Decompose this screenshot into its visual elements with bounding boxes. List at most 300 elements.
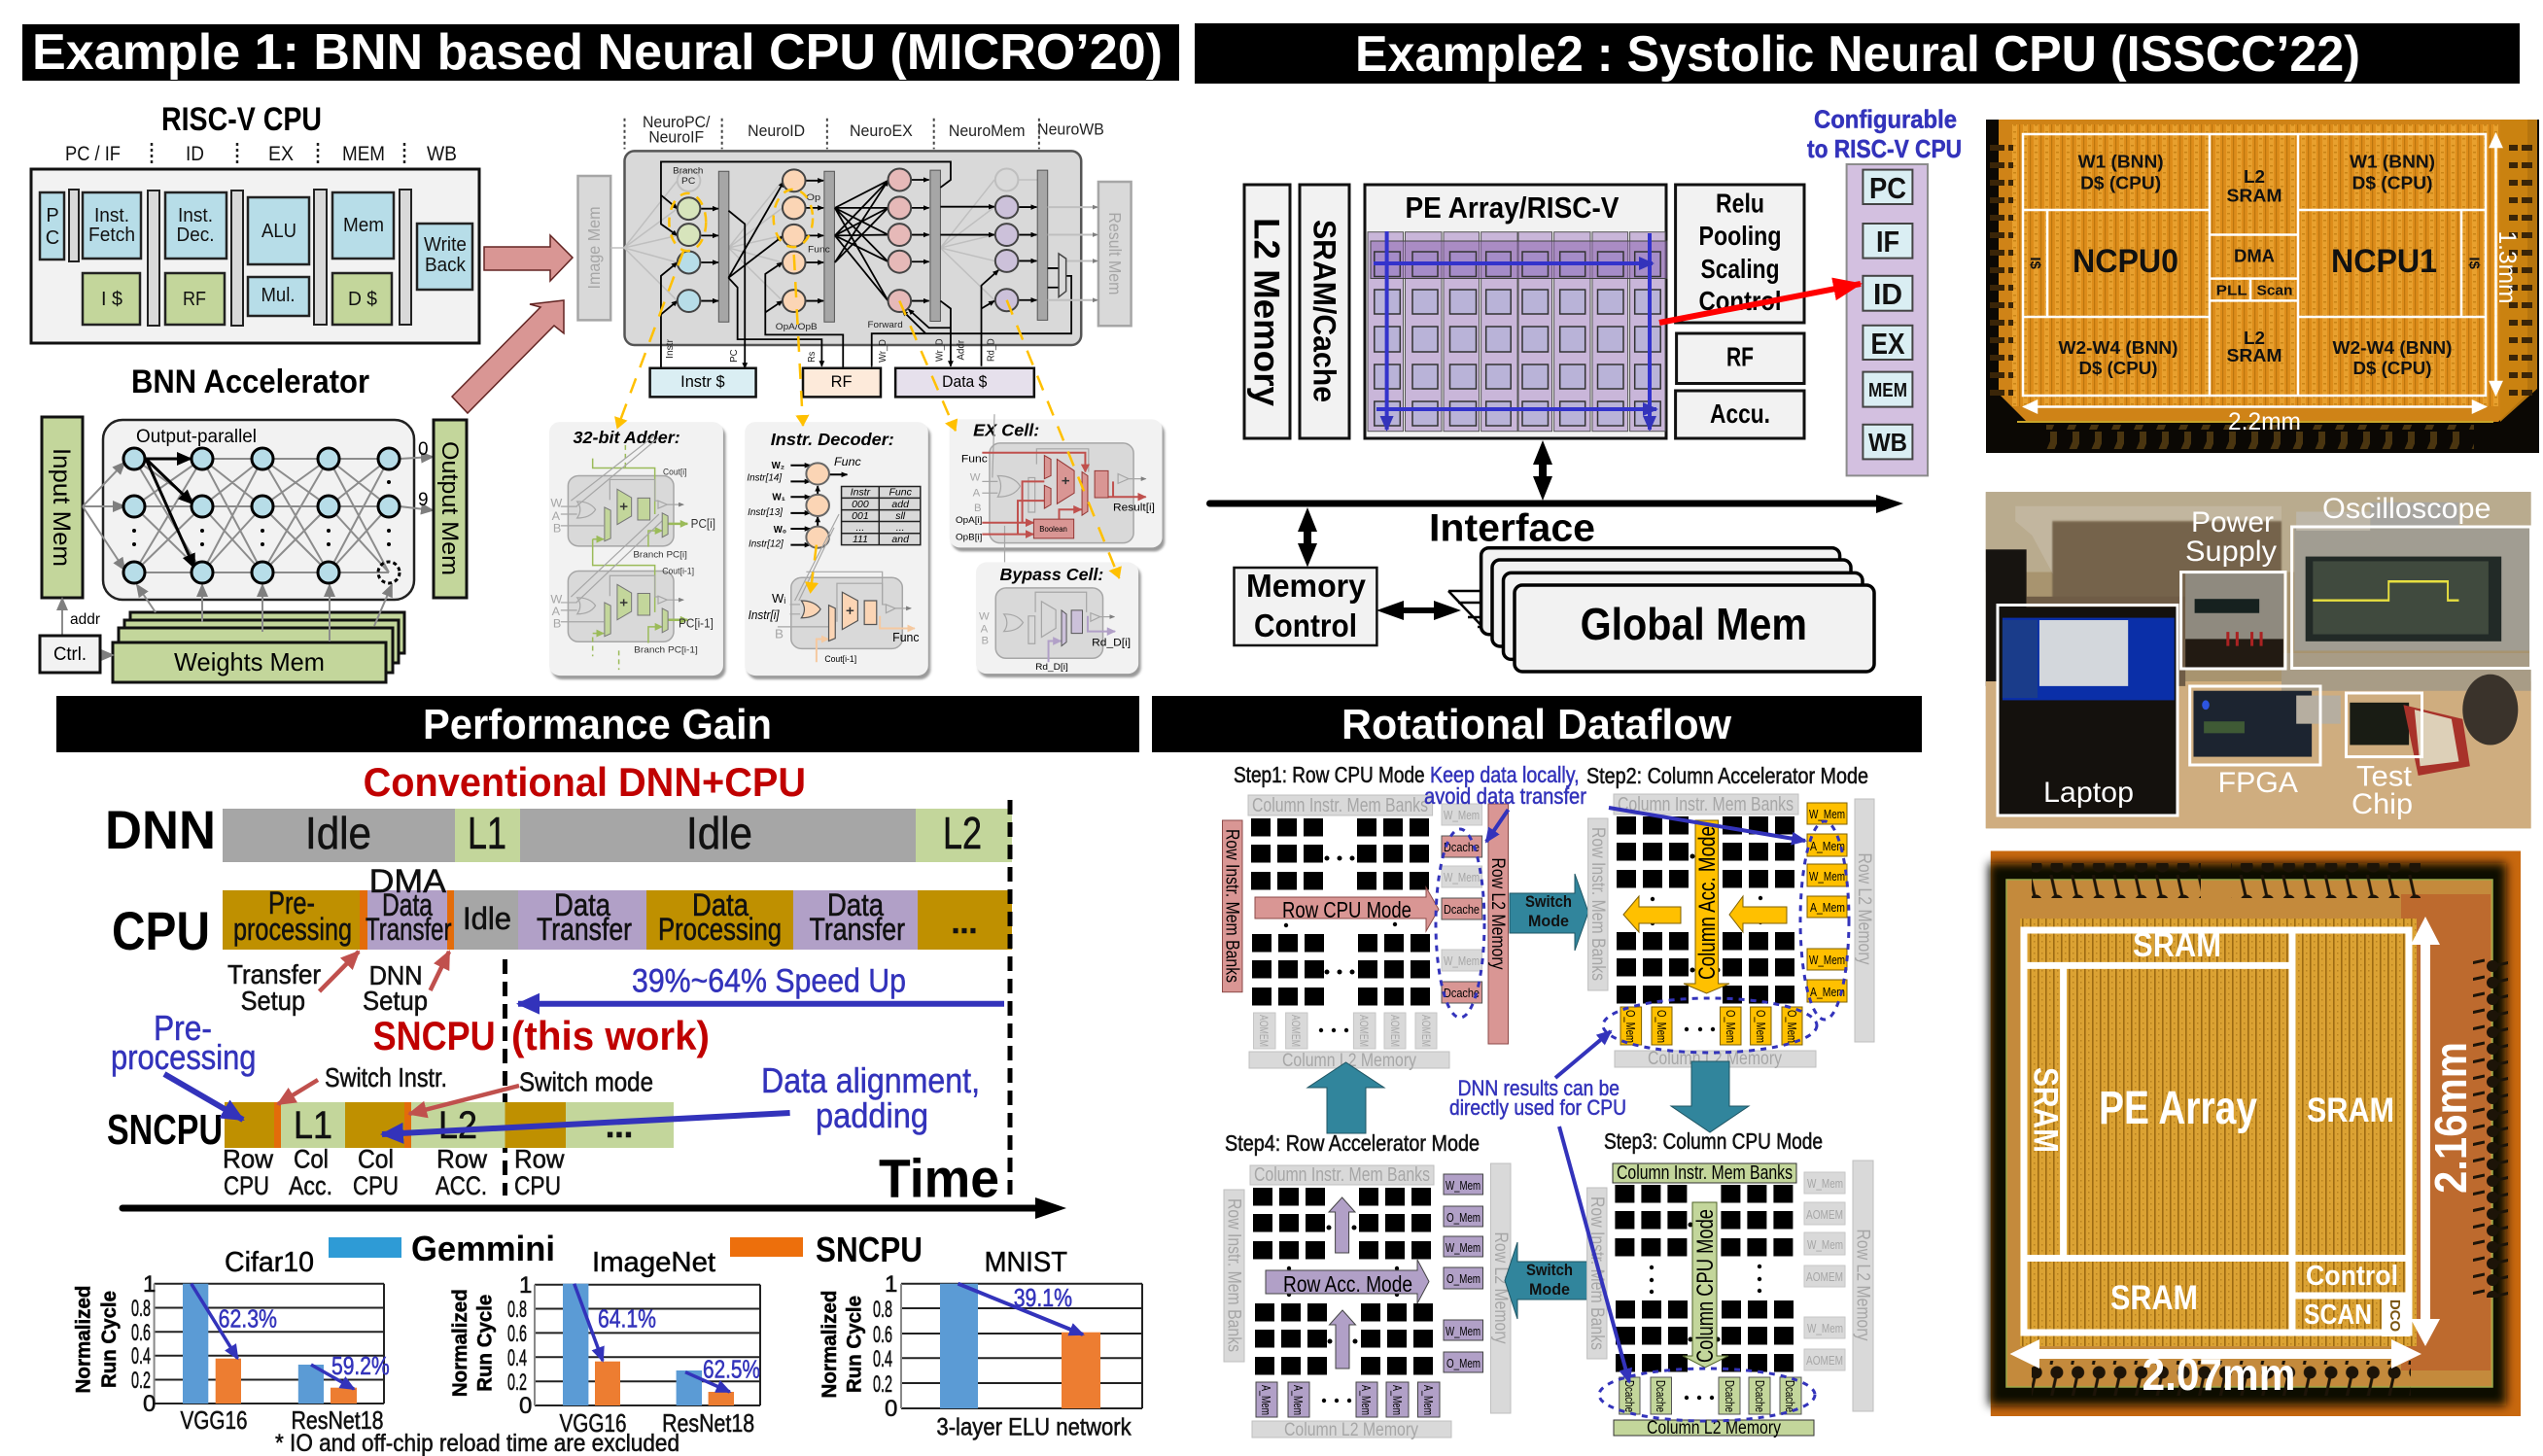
EX schematic: B xyxy=(974,503,982,514)
step 2 O_Mem row: O_Mem xyxy=(1724,1010,1738,1043)
execute stage neurons xyxy=(888,169,911,312)
decoder neurons xyxy=(747,455,861,550)
step 4 A_Mem row xyxy=(1256,1382,1440,1417)
bar chart: MNIST: 39.1% xyxy=(1014,1283,1072,1312)
bar chart: MNIST: 0.6 xyxy=(873,1322,892,1348)
arrow: switch mode step 1 to 2: Mode xyxy=(1528,912,1569,930)
EX schematic: OpA[i] xyxy=(956,515,983,526)
DNN timeline: Idle xyxy=(686,808,752,858)
decoder truth table: Instr xyxy=(851,488,871,499)
decoder truth table: ... xyxy=(856,523,864,534)
floorplan labels: SRAM xyxy=(2226,187,2282,206)
mode labels: Row xyxy=(223,1145,273,1174)
datapath labels: Forward xyxy=(868,320,903,330)
bar chart: Cifar10: Run Cycle xyxy=(98,1291,121,1388)
mode labels: CPU xyxy=(353,1171,399,1200)
adder labels: B xyxy=(553,522,561,535)
Column CPU Mode arrow xyxy=(1683,1202,1728,1368)
datapath labels: PC xyxy=(681,176,695,187)
mode labels: Row xyxy=(436,1145,487,1174)
step 3 W_Mem and AOMEM column: W_Mem xyxy=(1807,1176,1843,1191)
interface bus xyxy=(1209,495,1903,550)
datapath body xyxy=(624,151,1081,345)
heading: Performance Gain: Performance Gain xyxy=(423,701,772,748)
step 1 memories: Column Instr. Mem Banks xyxy=(1252,795,1428,816)
step 2 memories xyxy=(1587,794,1874,1069)
step 3 W_Mem and AOMEM column: AOMEM xyxy=(1806,1269,1843,1284)
bar chart: MNIST xyxy=(819,1247,1142,1441)
SNCPU heading: SNCPU xyxy=(373,1013,496,1058)
dimension labels xyxy=(2228,231,2521,435)
step 2 memories: Column L2 Memory xyxy=(1648,1049,1782,1069)
step 1 AOMEM row: AOMEM xyxy=(1257,1015,1271,1047)
bar chart: Cifar10: 0 xyxy=(143,1391,156,1417)
floorplan labels: L2 xyxy=(2244,329,2265,348)
bar chart: ImageNet: Run Cycle xyxy=(474,1295,496,1392)
decoder truth table: 000 xyxy=(852,500,869,510)
floorplan labels: SCAN xyxy=(2304,1300,2372,1331)
instrument labels: Test xyxy=(2356,761,2413,793)
block labels: Back xyxy=(425,255,467,276)
decoder truth table: Func xyxy=(889,488,912,499)
BNN Accelerator heading: BNN Accelerator xyxy=(131,364,369,400)
bar chart: Cifar10: ResNet18 xyxy=(292,1405,383,1435)
floorplan labels: SRAM xyxy=(2026,1067,2064,1153)
Row CPU Mode arrow: Row CPU Mode xyxy=(1282,897,1411,922)
Configurable callout: to RISC-V CPU xyxy=(1807,134,1962,163)
result wires xyxy=(1048,207,1097,300)
decoder title: Instr. Decoder: xyxy=(771,430,894,449)
step headings: Step4: Row Accelerator Mode xyxy=(1225,1130,1480,1156)
bar chart: ImageNet: ImageNet xyxy=(592,1247,715,1278)
floorplan labels: SRAM xyxy=(2226,346,2282,365)
EX schematic: A xyxy=(973,488,981,499)
bar chart: Cifar10: 1 xyxy=(143,1271,156,1298)
instrument labels: Laptop xyxy=(2043,777,2134,809)
adder labels: A xyxy=(552,509,561,523)
RISC-V stage column: WB xyxy=(1868,428,1907,457)
block labels: P xyxy=(46,205,59,226)
block labels: Write xyxy=(424,234,467,256)
step 2: Column Accelerator mode xyxy=(1587,794,1874,1069)
bar chart: ImageNet: 1 xyxy=(519,1272,532,1299)
mode labels xyxy=(223,1145,565,1200)
Accu block: Accu. xyxy=(1710,399,1770,429)
arrow: switch mode step 1 to 2: Switch xyxy=(1525,892,1572,911)
controller xyxy=(40,636,100,673)
PE array block xyxy=(1365,185,1667,438)
CPU timeline: Processing xyxy=(658,912,782,947)
step 4 W_Mem and O_Mem column: W_Mem xyxy=(1446,1178,1481,1193)
output index labels: 9 xyxy=(418,490,429,510)
dimension arrows xyxy=(2025,135,2501,412)
row highlight xyxy=(1371,241,1667,278)
weights memory stack xyxy=(113,612,404,682)
step 4: Row Accelerator mode xyxy=(1223,1163,1511,1440)
output index labels xyxy=(418,439,429,510)
adder labels: B xyxy=(553,617,561,631)
bar chart: MNIST: 0.2 xyxy=(873,1371,892,1398)
card: Instr Decoder xyxy=(745,422,928,676)
datapath labels: Wr_D xyxy=(878,339,888,363)
instrument labels: Chip xyxy=(2351,788,2413,820)
datapath labels xyxy=(665,166,997,363)
floorplan labels: D$ (CPU) xyxy=(2080,173,2161,192)
Row CPU Mode arrow xyxy=(1255,887,1439,931)
step 3 memories xyxy=(1586,1161,1873,1439)
step 3 Dcache row xyxy=(1620,1377,1801,1414)
CPU timeline xyxy=(223,863,1012,950)
EX schematic: Func xyxy=(961,454,988,466)
bar chart: MNIST: 1 xyxy=(885,1271,897,1298)
step 2 memories: Column Instr. Mem Banks xyxy=(1618,794,1794,815)
decoder neurons: Func xyxy=(834,455,861,468)
step 4 PE grid xyxy=(1253,1188,1433,1374)
adder labels: Branch PC[i-1] xyxy=(634,645,698,656)
step 1 W_Mem and Dcache column: Dcache xyxy=(1444,986,1480,1000)
step 3 memories: Row Instr. Mem Banks xyxy=(1586,1196,1607,1350)
EX schematic: Boolean xyxy=(1039,525,1067,534)
time axis xyxy=(122,1197,1066,1219)
wall and bench xyxy=(1986,492,2531,828)
input memory: Input Mem xyxy=(48,448,75,567)
Bypass schematic xyxy=(979,588,1131,673)
datapath labels: Wr_D xyxy=(934,338,946,362)
bar chart: Cifar10 xyxy=(72,1247,390,1435)
step 4 W_Mem and O_Mem column: W_Mem xyxy=(1446,1240,1481,1255)
bar chart: MNIST: MNIST xyxy=(985,1247,1067,1278)
fetch stage neurons xyxy=(678,170,700,312)
SNCPU timeline: L2 xyxy=(438,1104,477,1147)
heading: Example 1: Example 1: BNN based Neural CPU (MICRO’20) xyxy=(32,24,1163,81)
dimension labels: 2.2mm xyxy=(2228,408,2301,435)
step 4 W_Mem and O_Mem column: O_Mem xyxy=(1446,1356,1481,1370)
global mem stack xyxy=(1448,548,1874,672)
Pre-processing callout xyxy=(111,1008,257,1077)
CPU timeline: Transfer xyxy=(537,912,632,947)
EX schematic: W xyxy=(970,472,981,484)
Column CPU Mode arrow: Column CPU Mode xyxy=(1692,1209,1719,1363)
datapath labels: Rs xyxy=(807,352,818,363)
bar chart: Cifar10: VGG16 xyxy=(181,1405,247,1435)
bar chart: ImageNet: 64.1% xyxy=(598,1304,656,1334)
floorplan labels: W1 (BNN) xyxy=(2350,153,2435,172)
step 1 memories: Column L2 Memory xyxy=(1282,1051,1416,1071)
step headings: Step2: Column Accelerator Mode xyxy=(1586,763,1868,788)
step 1 W_Mem and Dcache column: W_Mem xyxy=(1444,953,1480,968)
image memory: Image Mem xyxy=(584,206,604,290)
bond pads xyxy=(2032,863,2508,1396)
function units block: Relu xyxy=(1716,189,1764,218)
network panel xyxy=(103,420,414,600)
floorplan labels: SRAM xyxy=(2110,1279,2198,1317)
stage labels: NeuroPC/ xyxy=(643,112,711,131)
adder labels: PC[i] xyxy=(691,516,715,531)
memory control block: Memory xyxy=(1246,568,1367,604)
L2 memory block xyxy=(1244,185,1290,438)
card shadows xyxy=(552,423,1165,679)
DNN timeline: Idle xyxy=(305,808,371,858)
DNN timeline xyxy=(223,808,1012,862)
step 3 W_Mem and AOMEM column: AOMEM xyxy=(1806,1353,1843,1368)
pipeline stage labels: MEM xyxy=(342,143,385,165)
DCO label: DCO xyxy=(2386,1300,2403,1332)
output-parallel highlighted edges xyxy=(146,459,194,568)
step 2 W_Mem and A_Mem column: W_Mem xyxy=(1809,953,1845,967)
SRAM cache block: SRAM/Cache xyxy=(1306,220,1341,402)
controller: Ctrl. xyxy=(53,644,87,665)
stage labels: NeuroMem xyxy=(949,121,1026,140)
Configurable callout xyxy=(1807,105,1962,163)
step 2 W_Mem and A_Mem column xyxy=(1807,803,1847,1002)
pipeline stage labels: EX xyxy=(268,143,294,165)
function units block: Control xyxy=(1699,286,1781,316)
step 3 Dcache row: Dcache xyxy=(1723,1380,1737,1412)
RISC-V stage column xyxy=(1847,164,1928,475)
photo: NCPU die micrograph xyxy=(1986,120,2539,453)
bar chart: MNIST: 0.8 xyxy=(873,1297,892,1323)
step 4 W_Mem and O_Mem column xyxy=(1444,1174,1483,1372)
decoder neurons: W₁ xyxy=(772,493,785,503)
CPU timeline: Transfer xyxy=(366,912,452,947)
step 1 W_Mem and Dcache column: Dcache xyxy=(1444,840,1480,854)
Bypass schematic: Rd_D[i] xyxy=(1092,638,1131,649)
dark halo xyxy=(1989,863,2506,1405)
decoder cell: Wᵢ xyxy=(772,591,785,606)
Configurable callout: Configurable xyxy=(1814,105,1957,134)
datapath black wires xyxy=(661,161,1071,368)
decode stage neurons xyxy=(783,169,806,312)
FPGA board xyxy=(2193,691,2312,757)
block labels: Dec. xyxy=(177,225,214,246)
SNCPU heading xyxy=(373,1013,710,1058)
SNCPU heading: (this work) xyxy=(511,1013,710,1058)
callout arrows xyxy=(1486,808,1805,1382)
bar chart: Cifar10: 0.8 xyxy=(131,1296,151,1322)
decoder cell: Cout[i-1] xyxy=(824,654,856,665)
setup labels: DNN xyxy=(369,960,423,990)
block labels: D $ xyxy=(348,289,377,310)
decoder neurons: W₂ xyxy=(772,461,784,471)
SNCPU row label: SNCPU xyxy=(107,1106,223,1154)
mode labels: Col xyxy=(294,1145,329,1174)
mode labels: ACC. xyxy=(435,1171,487,1200)
stage labels: NeuroID xyxy=(748,121,805,140)
step 1 memories xyxy=(1222,795,1509,1071)
step 3 W_Mem and AOMEM column xyxy=(1804,1172,1845,1370)
register file xyxy=(803,368,881,397)
CPU timeline: Data xyxy=(692,887,749,922)
step headings: Step1: Row CPU Mode xyxy=(1234,762,1425,787)
setup arrows xyxy=(319,952,449,991)
EX schematic xyxy=(956,414,1155,570)
step 1 dcache oval xyxy=(1436,829,1484,1018)
step 1 memories: Row Instr. Mem Banks xyxy=(1222,829,1242,983)
CPU body xyxy=(31,169,479,343)
red reconfiguration arrow xyxy=(1659,284,1861,323)
output memory xyxy=(434,420,467,598)
SRAM cache block xyxy=(1300,185,1349,438)
floorplan lines xyxy=(2023,134,2486,396)
decoder truth table: and xyxy=(891,535,909,545)
block labels: Fetch xyxy=(88,225,135,246)
interface label: Interface xyxy=(1429,507,1595,550)
data cache: Data $ xyxy=(942,372,988,391)
decoder truth table: sll xyxy=(895,511,906,522)
step 3 W_Mem and AOMEM column: W_Mem xyxy=(1807,1321,1843,1335)
DNN row label: DNN xyxy=(105,799,216,860)
mode labels: Acc. xyxy=(289,1171,332,1200)
setup labels: Setup xyxy=(241,986,305,1016)
global mem stack: Global Mem xyxy=(1581,599,1807,649)
step 4 W_Mem and O_Mem column: O_Mem xyxy=(1446,1271,1481,1286)
panel: timeline comparison xyxy=(105,759,1066,1219)
stage labels: NeuroEX xyxy=(850,121,913,140)
yellow flow arrows xyxy=(1623,896,1787,932)
decoder truth table: 111 xyxy=(853,535,868,545)
yellow callout arrows xyxy=(617,251,1119,593)
instrument labels: Power xyxy=(2191,506,2274,538)
step 2 O_Mem row: O_Mem xyxy=(1623,1010,1638,1043)
instrument outline boxes xyxy=(1998,527,2531,815)
instrument labels: Oscilloscope xyxy=(2322,493,2491,525)
PE to bus double arrow xyxy=(1533,440,1552,501)
datapath labels: OpA/OpB xyxy=(776,322,818,332)
stage registers xyxy=(69,190,411,326)
step 3 W_Mem and AOMEM column: W_Mem xyxy=(1807,1237,1843,1252)
Bypass schematic: W xyxy=(979,611,990,623)
dimension labels xyxy=(2142,1042,2476,1400)
step 1 AOMEM row: AOMEM xyxy=(1289,1015,1303,1047)
instrument labels xyxy=(2043,493,2491,820)
mode labels: CPU xyxy=(514,1171,561,1200)
step 4 A_Mem row: A_Mem xyxy=(1421,1385,1436,1415)
write-back mux xyxy=(1059,254,1066,297)
instrument labels: Supply xyxy=(2185,536,2277,568)
step 4 memories xyxy=(1223,1163,1511,1440)
output index labels: 0 xyxy=(418,439,429,460)
CPU timeline: ... xyxy=(952,905,977,940)
oscilloscope xyxy=(2294,529,2531,651)
Pre-processing callout: processing xyxy=(111,1037,257,1077)
Time label: Time xyxy=(879,1148,999,1209)
output-parallel label: Output-parallel xyxy=(136,427,257,447)
CPU timeline: processing xyxy=(233,912,352,947)
step 4 memories: Row L2 Memory xyxy=(1490,1232,1511,1344)
step 3 memories: Column L2 Memory xyxy=(1647,1418,1781,1439)
bar chart: ImageNet: 0.2 xyxy=(507,1369,527,1396)
step 1 W_Mem and Dcache column: W_Mem xyxy=(1444,808,1480,822)
step 2 W_Mem and A_Mem column: A_Mem xyxy=(1810,985,1845,999)
datapath labels: Op xyxy=(806,192,821,203)
green memory blocks xyxy=(83,273,392,325)
heading: Rotational Dataflow: Rotational Dataflow xyxy=(1341,701,1732,748)
step 4 W_Mem and O_Mem column: W_Mem xyxy=(1446,1324,1481,1338)
photo: SNCPU die micrograph xyxy=(1989,851,2521,1416)
DCO block xyxy=(2382,1296,2410,1336)
panel: NeuroCPU pipeline and cells xyxy=(549,112,1165,679)
processing elements xyxy=(1375,252,1660,426)
step 4 A_Mem row: A_Mem xyxy=(1359,1385,1374,1415)
callout: keep data locally: avoid data transfer xyxy=(1424,783,1586,809)
step 1 AOMEM row: AOMEM xyxy=(1357,1015,1371,1047)
step 4 memories: Column Instr. Mem Banks xyxy=(1254,1164,1430,1186)
panel: BNN Accelerator xyxy=(40,364,467,682)
upward flow arrows xyxy=(1329,1197,1355,1369)
weights label: Weights Mem xyxy=(174,647,325,676)
datapath labels: Func xyxy=(808,245,830,256)
block labels: Mem xyxy=(343,215,384,236)
setup labels: Transfer xyxy=(227,959,321,989)
Bypass schematic: B xyxy=(982,636,989,647)
decoder truth table: 001 xyxy=(852,511,869,522)
step 2 PE grid xyxy=(1617,816,1794,1003)
heading: Example 2: Example2 : Systolic Neural CPU (ISSCC’22) xyxy=(1355,26,2360,83)
bar chart: MNIST: 0.4 xyxy=(873,1346,892,1372)
block labels: C xyxy=(46,227,59,249)
bar chart: ImageNet: VGG16 xyxy=(560,1408,626,1438)
step 4 W_Mem and O_Mem column: O_Mem xyxy=(1446,1210,1481,1225)
step 1 W_Mem and Dcache column xyxy=(1442,804,1482,1003)
SNCPU timeline: L1 xyxy=(294,1104,332,1147)
step 3: Column CPU mode xyxy=(1586,1161,1873,1439)
decoder neurons: Instr[14] xyxy=(747,473,783,484)
adder labels: A xyxy=(552,605,561,618)
datapath labels: Addr xyxy=(956,339,967,360)
callout: keep data locally: Keep data locally, xyxy=(1430,762,1580,787)
floorplan labels: Scan xyxy=(2257,283,2292,299)
memory control to global mem double arrow xyxy=(1376,601,1461,620)
Conventional heading: Conventional DNN+CPU xyxy=(364,759,806,805)
block labels: ALU xyxy=(261,221,296,242)
arrow: switch mode step 3 to 4: Mode xyxy=(1529,1280,1570,1299)
step 3 Dcache row: Dcache xyxy=(1783,1380,1797,1412)
RISC-V stage column: EX xyxy=(1870,327,1905,361)
pipeline registers xyxy=(718,170,1048,322)
memory control block xyxy=(1235,568,1376,645)
network connections xyxy=(62,457,433,655)
EX schematic: OpB[i] xyxy=(956,533,983,542)
step 3 memories: Column Instr. Mem Banks xyxy=(1617,1162,1793,1184)
floorplan labels: Control xyxy=(2306,1261,2398,1292)
Instr cache xyxy=(650,368,756,397)
callout: DNN results xyxy=(1449,1076,1626,1120)
datapath labels: PC xyxy=(729,349,740,363)
switch labels xyxy=(325,1062,653,1097)
Bypass schematic: Rd_D[i] xyxy=(1035,662,1068,673)
datapath labels: Instr xyxy=(665,338,676,359)
step 3 dashed oval xyxy=(1599,1369,1815,1421)
step 2 W_Mem and A_Mem column: W_Mem xyxy=(1809,807,1845,821)
bar chart: ImageNet xyxy=(449,1247,760,1438)
bar chart: Cifar10: 0.2 xyxy=(131,1368,151,1394)
function units block: Scaling xyxy=(1701,254,1779,284)
bar chart: ImageNet: 0.6 xyxy=(507,1321,527,1347)
decoder neurons: Instr[13] xyxy=(748,507,784,518)
Pre-processing callout: Pre- xyxy=(154,1008,212,1048)
RF block xyxy=(1677,333,1804,383)
arrow: switch mode step 3 to 4: Switch xyxy=(1526,1261,1573,1279)
block labels: Mul. xyxy=(261,285,296,306)
floorplan labels: I$ xyxy=(2465,257,2483,270)
floorplan labels: PLL xyxy=(2216,283,2247,299)
legend: Gemmini and SNCPU xyxy=(329,1229,923,1269)
legend: Gemmini and SNCPU: SNCPU xyxy=(816,1230,923,1269)
PE array title: PE Array/RISC-V xyxy=(1406,191,1620,225)
adder labels: Branch PC[i] xyxy=(633,550,687,561)
CPU row label: CPU xyxy=(112,900,210,961)
panel: RISC-V CPU pipeline xyxy=(31,101,479,343)
